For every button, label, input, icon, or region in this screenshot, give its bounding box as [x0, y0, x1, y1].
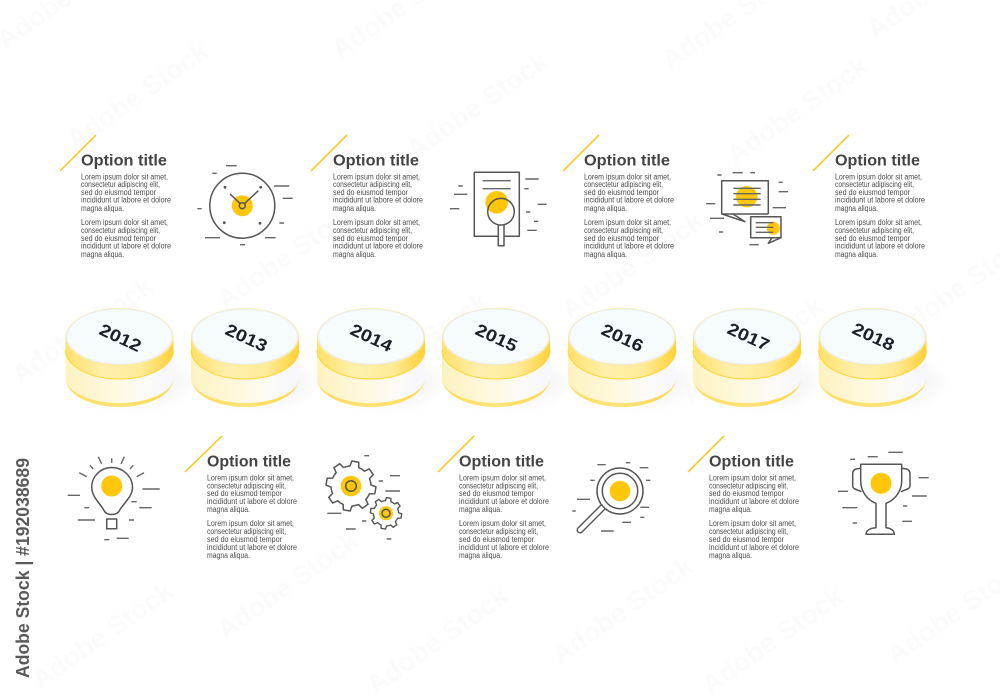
icon: chat bubbles — [706, 173, 788, 245]
text block: bottom option 3: magna aliqua. — [709, 505, 752, 514]
watermark: Adobe Stock — [556, 205, 709, 325]
watermark: Adobe Stock — [211, 525, 364, 645]
text block: bottom option 3: consectetur adipiscing elit, — [709, 482, 788, 490]
text block: bottom option 1: Lorem ipsum dolor sit amet, — [207, 519, 294, 528]
cylinder: 2013: 2013 — [222, 320, 270, 356]
icon: clock — [197, 166, 293, 245]
text block: top option 1: incididunt ut labore et dolore — [81, 242, 172, 251]
cylinder: 2012 — [66, 308, 188, 407]
cylinder: 2016 — [568, 308, 690, 407]
cylinder: 2014: 2014 — [347, 320, 396, 356]
cylinder: 2013 — [191, 308, 313, 407]
text block: top option 3: magna aliqua. — [584, 204, 627, 213]
text block: bottom option 1: incididunt ut labore et dolore — [207, 543, 298, 552]
text block: top option 2: sed do eiusmod tempor — [333, 234, 408, 243]
text block: top option 1: magna aliqua. — [81, 250, 124, 259]
text block: top option 1: consectetur adipiscing elit, — [81, 180, 160, 189]
text block: top option 1: Option title — [81, 152, 167, 170]
text block: bottom option 3: sed do eiusmod tempor — [709, 535, 784, 544]
text block: top option 4: Option title — [835, 152, 920, 170]
text block: top option 4: magna aliqua. — [835, 250, 878, 259]
text block: top option 4: incididunt ut labore et dolore — [835, 196, 926, 205]
text block: bottom option 2: incididunt ut labore et dolore — [459, 497, 550, 506]
cylinder: 2015: 2015 — [472, 320, 520, 356]
stock id vertical text: Adobe Stock | #192038689 — [13, 458, 33, 678]
text block: top option 3: sed do eiusmod tempor — [584, 188, 659, 197]
text block: top option 3: magna aliqua. — [584, 250, 627, 259]
text block: top option 2: consectetur adipiscing elit, — [333, 180, 412, 189]
icon: document with magnifier — [450, 172, 547, 246]
text block: top option 4: sed do eiusmod tempor — [835, 234, 910, 243]
text block: top option 4: Lorem ipsum dolor sit amet, — [835, 218, 922, 227]
cylinder: 2015 — [442, 308, 564, 407]
text block: top option 3: Option title — [584, 152, 670, 170]
text block: top option 2: sed do eiusmod tempor — [333, 188, 408, 197]
cylinder: 2018: 2018 — [849, 319, 897, 355]
text block: top option 2: incididunt ut labore et dolore — [333, 242, 424, 251]
text block: top option 3: consectetur adipiscing elit, — [584, 226, 663, 235]
text block: bottom option 2: Option title — [459, 454, 544, 470]
watermark: Adobe Stock — [341, 285, 494, 405]
text block: bottom option 3: incididunt ut labore et dolore — [709, 497, 800, 506]
text block: bottom option 1: sed do eiusmod tempor — [207, 489, 282, 498]
watermark: Adobe Stock — [61, 35, 214, 155]
cylinder: 2017: 2017 — [724, 319, 772, 355]
icon: light bulb — [68, 457, 160, 540]
watermark: Adobe Stock — [401, 45, 554, 165]
text block: top option 1: sed do eiusmod tempor — [81, 188, 156, 197]
watermark: Adobe Stock — [721, 50, 874, 170]
icon: trophy — [838, 452, 929, 534]
text block: bottom option 3: consectetur adipiscing elit, — [709, 527, 788, 536]
text block: top option 3: Lorem ipsum dolor sit amet, — [584, 218, 671, 227]
text block: bottom option 2 — [438, 436, 550, 560]
text block: bottom option 3: incididunt ut labore et dolore — [709, 543, 800, 552]
text block: bottom option 2: consectetur adipiscing elit, — [459, 527, 538, 536]
text block: top option 3: consectetur adipiscing elit, — [584, 180, 663, 189]
cylinder: 2017 — [693, 308, 815, 407]
text block: top option 2: Lorem ipsum dolor sit amet, — [333, 172, 420, 181]
text block: top option 4 — [813, 135, 926, 259]
text block: bottom option 2: consectetur adipiscing elit, — [459, 482, 538, 490]
text block: bottom option 3: magna aliqua. — [709, 551, 752, 560]
text block: bottom option 2: incididunt ut labore et dolore — [459, 543, 550, 552]
text block: top option 2: magna aliqua. — [333, 250, 376, 259]
text block: top option 4: sed do eiusmod tempor — [835, 188, 910, 197]
watermark: Adobe Stock — [26, 575, 179, 695]
text block: bottom option 2: Lorem ipsum dolor sit amet, — [459, 474, 546, 483]
text block: top option 1: Lorem ipsum dolor sit amet, — [81, 218, 168, 227]
text block: top option 1: sed do eiusmod tempor — [81, 234, 156, 243]
text block: top option 4: incididunt ut labore et dolore — [835, 242, 926, 251]
text block: bottom option 1: Option title — [207, 454, 291, 470]
icon: gears — [322, 456, 404, 539]
cylinder: 2016: 2016 — [598, 320, 646, 356]
text block: bottom option 1: sed do eiusmod tempor — [207, 535, 282, 544]
year cylinders row — [66, 308, 940, 407]
cylinder: 2014 — [317, 308, 439, 407]
text block: bottom option 3: Option title — [709, 454, 794, 470]
text block: top option 1: incididunt ut labore et dolore — [81, 196, 172, 205]
text block: bottom option 1: incididunt ut labore et dolore — [207, 497, 298, 506]
watermark: Adobe Stock — [546, 550, 699, 670]
text block: top option 3: incididunt ut labore et dolore — [584, 242, 675, 251]
text block: bottom option 3 — [688, 436, 800, 560]
text block: top option 2: incididunt ut labore et dolore — [333, 196, 424, 205]
cylinder: 2018 — [818, 308, 940, 407]
text block: bottom option 1: consectetur adipiscing elit, — [207, 482, 286, 490]
text block: top option 1: magna aliqua. — [81, 204, 124, 213]
text block: top option 1: Lorem ipsum dolor sit amet, — [81, 172, 168, 181]
text block: top option 4: consectetur adipiscing elit, — [835, 226, 914, 235]
text block: bottom option 1: Lorem ipsum dolor sit amet, — [207, 474, 294, 483]
text block: top option 4: magna aliqua. — [835, 204, 878, 213]
text block: bottom option 2: magna aliqua. — [459, 505, 502, 514]
text block: bottom option 2: magna aliqua. — [459, 551, 502, 560]
watermark: Adobe Stock — [676, 290, 829, 410]
text block: bottom option 1: consectetur adipiscing elit, — [207, 527, 286, 536]
text block: top option 3 — [563, 135, 675, 259]
text block: top option 2: Option title — [333, 152, 419, 170]
icon: magnifying glass — [572, 463, 650, 531]
text block: top option 3: incididunt ut labore et dolore — [584, 196, 675, 205]
text block: bottom option 2: sed do eiusmod tempor — [459, 535, 534, 544]
text block: top option 1: consectetur adipiscing elit, — [81, 226, 160, 235]
watermark: Adobe Stock — [6, 270, 159, 390]
text block: bottom option 3: Lorem ipsum dolor sit amet, — [709, 474, 796, 483]
text block: top option 3: sed do eiusmod tempor — [584, 234, 659, 243]
text block: bottom option 3: Lorem ipsum dolor sit amet, — [709, 519, 796, 528]
cylinder: 2012: 2012 — [96, 320, 144, 356]
text block: bottom option 1: magna aliqua. — [207, 505, 250, 514]
text block: bottom option 1 — [185, 436, 298, 560]
text block: top option 1 — [60, 135, 172, 259]
text block: top option 2 — [311, 135, 424, 259]
text block: bottom option 1: magna aliqua. — [207, 551, 250, 560]
text block: bottom option 3: sed do eiusmod tempor — [709, 489, 784, 498]
text block: top option 2: magna aliqua. — [333, 204, 376, 213]
watermark: Adobe Stock — [211, 195, 364, 315]
text block: bottom option 2: sed do eiusmod tempor — [459, 489, 534, 498]
text block: top option 4: Lorem ipsum dolor sit amet, — [835, 172, 922, 181]
text block: bottom option 2: Lorem ipsum dolor sit amet, — [459, 519, 546, 528]
text block: top option 3: Lorem ipsum dolor sit amet, — [584, 172, 671, 181]
text block: top option 4: consectetur adipiscing elit, — [835, 180, 914, 189]
text block: top option 2: consectetur adipiscing elit, — [333, 226, 412, 235]
text block: top option 2: Lorem ipsum dolor sit amet, — [333, 218, 420, 227]
